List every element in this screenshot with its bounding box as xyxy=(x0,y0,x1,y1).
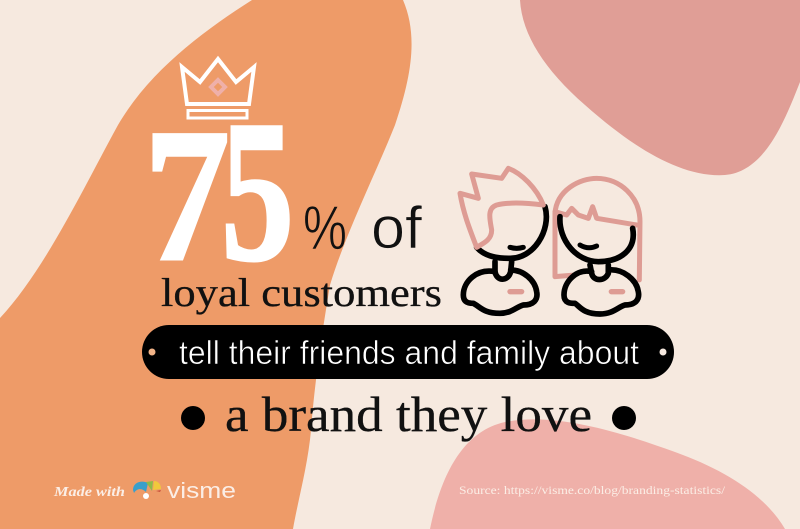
boy shirt mark xyxy=(510,284,522,300)
blob: pink bottom right xyxy=(430,419,785,529)
girl face and body xyxy=(560,217,639,314)
blob: orange xyxy=(0,0,412,529)
big number: 5 xyxy=(221,79,294,303)
blob: rose top right xyxy=(520,0,800,175)
boy hair xyxy=(460,168,543,247)
banner dot left xyxy=(148,348,156,356)
heading: percent of: of xyxy=(371,195,423,261)
watermark: made with visme: Made with xyxy=(53,485,125,500)
banner pill xyxy=(142,325,674,379)
bullet right xyxy=(612,406,636,430)
icon: crown jewel xyxy=(211,80,225,94)
big number xyxy=(144,79,294,303)
icon: girl xyxy=(555,178,640,314)
banner dot right xyxy=(660,348,666,356)
icon: boy xyxy=(460,168,546,313)
banner text: tell their friends and family about xyxy=(179,334,639,371)
watermark: made with visme: visme xyxy=(167,478,236,503)
visme logo xyxy=(133,481,161,499)
girl hair xyxy=(555,178,640,280)
girl shirt mark xyxy=(611,284,623,300)
text: loyal customers: loyal customers xyxy=(161,270,442,315)
boy face and body xyxy=(463,207,546,313)
heading: percent of: % xyxy=(303,194,347,263)
big number: 7 xyxy=(144,91,230,301)
text: a brand they love: a brand they love xyxy=(225,386,592,442)
bullet left xyxy=(181,406,205,430)
icon: crown xyxy=(182,59,254,118)
heading: percent of xyxy=(303,194,423,263)
source: Source: https://visme.co/blog/branding-statistics/ xyxy=(459,485,726,497)
watermark: made with visme xyxy=(53,478,236,503)
